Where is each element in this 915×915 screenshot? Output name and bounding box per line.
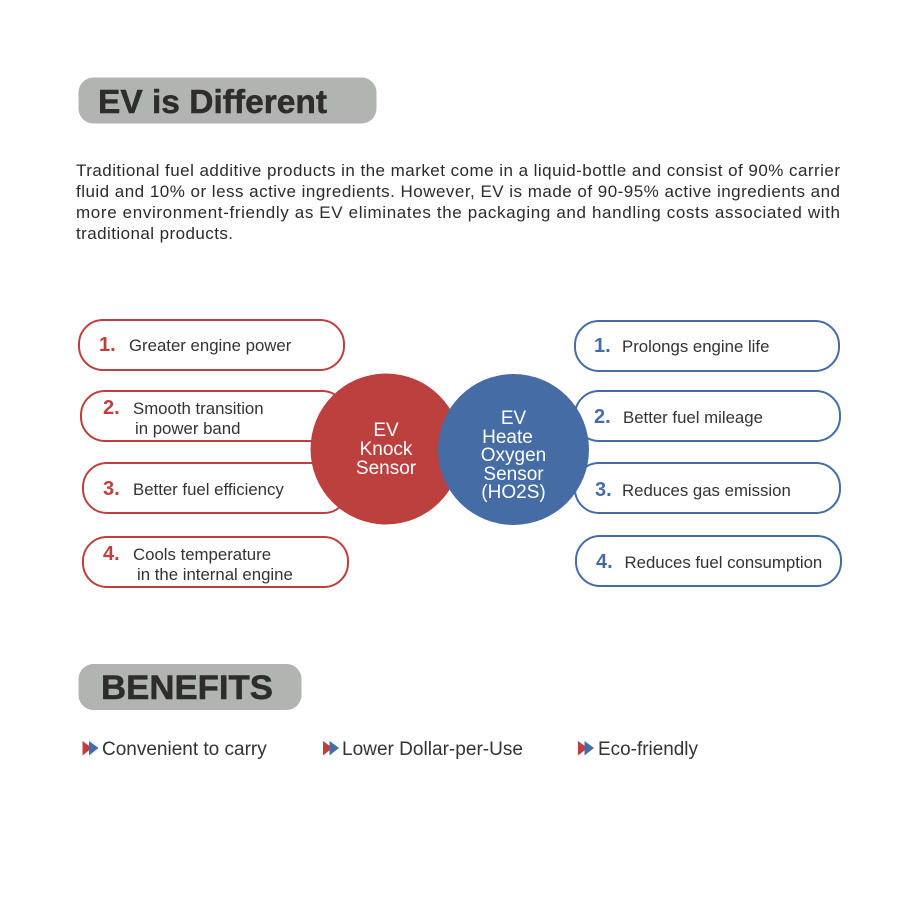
item: greater engine power xyxy=(79,320,344,370)
heading: EV is Different xyxy=(78,78,376,124)
panel: knock sensor benefits xyxy=(79,320,348,587)
item: better fuel efficiency xyxy=(83,463,348,513)
circle: EV Knock Sensor xyxy=(310,374,462,524)
item: smooth transition: Smooth transition xyxy=(133,399,264,418)
circle: EV Knock Sensor: Knock xyxy=(360,439,413,460)
heading: EV is Different: EV is Different xyxy=(98,83,327,120)
item: reduces gas emission: 3. xyxy=(595,479,612,501)
item: cools temperature: in the internal engine xyxy=(137,565,293,584)
item: cools temperature: Cools temperature xyxy=(133,545,271,564)
circle: EV Heate Oxygen Sensor (HO2S): (HO2S) xyxy=(481,482,546,503)
panel: oxygen sensor benefits xyxy=(575,321,841,586)
circle: EV Heate Oxygen Sensor (HO2S): EV xyxy=(501,408,526,429)
item: greater engine power: Greater engine power xyxy=(129,336,292,355)
circle: EV Heate Oxygen Sensor (HO2S): Oxygen xyxy=(481,445,546,466)
circle: EV Heate Oxygen Sensor (HO2S) xyxy=(438,374,589,525)
intro paragraph: fluid and 10% or less active ingredients. However, EV is made of 90-95% active ingredients and xyxy=(76,182,840,201)
item: better fuel efficiency: 3. xyxy=(103,478,120,500)
item: better fuel mileage: Better fuel mileage xyxy=(623,408,763,427)
circle: EV Heate Oxygen Sensor (HO2S): Sensor xyxy=(483,464,544,485)
item: smooth transition xyxy=(81,391,346,441)
item: prolongs engine life xyxy=(575,321,839,371)
intro paragraph: more environment-friendly as EV eliminates the packaging and handling costs associated with xyxy=(76,203,840,222)
circle: EV Heate Oxygen Sensor (HO2S): Heate xyxy=(482,427,533,448)
item: smooth transition: in power band xyxy=(135,419,240,438)
item: better fuel mileage: 2. xyxy=(594,406,611,428)
item: reduces gas emission xyxy=(575,463,840,513)
heading: BENEFITS: BENEFITS xyxy=(101,669,273,707)
heading: BENEFITS xyxy=(78,664,302,710)
item: cools temperature: 4. xyxy=(103,543,120,565)
benefit: eco-friendly: Eco-friendly xyxy=(598,739,698,760)
item: prolongs engine life: 1. xyxy=(594,335,611,357)
item: reduces fuel consumption: 4. xyxy=(596,551,613,573)
item: prolongs engine life: Prolongs engine life xyxy=(622,337,769,356)
circle: EV Knock Sensor: EV xyxy=(373,420,399,441)
item: greater engine power: 1. xyxy=(99,334,116,356)
intro paragraph: traditional products. xyxy=(76,224,233,243)
item: reduces fuel consumption: Reduces fuel consumption xyxy=(624,553,822,572)
item: cools temperature xyxy=(83,537,348,587)
benefit: lower dollar-per-use: Lower Dollar-per-Use xyxy=(342,739,523,760)
item: better fuel efficiency: Better fuel efficiency xyxy=(133,480,284,499)
intro paragraph: Traditional fuel additive products in the market come in a liquid-bottle and consist of 90% carrier xyxy=(76,161,840,180)
intro paragraph xyxy=(76,161,840,243)
item: reduces fuel consumption xyxy=(576,536,841,586)
item: reduces gas emission: Reduces gas emission xyxy=(622,481,791,500)
circle: EV Knock Sensor: Sensor xyxy=(356,458,417,479)
item: better fuel mileage xyxy=(575,391,840,441)
benefit: convenient to carry: Convenient to carry xyxy=(102,739,267,760)
item: smooth transition: 2. xyxy=(103,397,120,419)
